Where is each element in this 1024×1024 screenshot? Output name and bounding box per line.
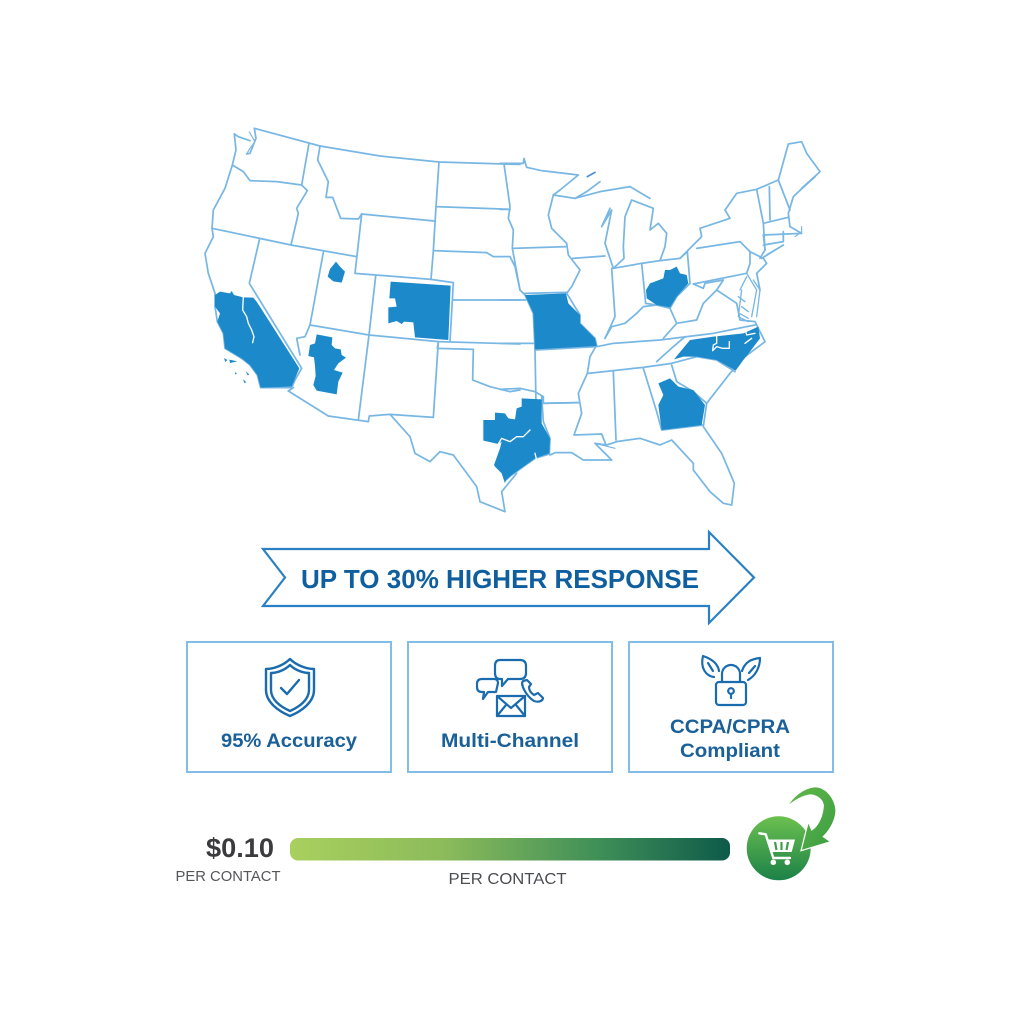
label: CCPA/CPRA Compliant [670, 716, 790, 762]
response arrow banner [263, 532, 754, 623]
return arrow [787, 787, 836, 851]
label: CCPA/CPRA Compliant: CCPA/CPRA [670, 716, 790, 738]
cart glyph [759, 833, 795, 865]
card: accuracy [187, 642, 391, 772]
state: Ohio region [646, 267, 688, 307]
state: California [215, 291, 299, 388]
US map [205, 128, 820, 512]
state: North Carolina [674, 327, 760, 371]
state: Texas region [483, 398, 550, 483]
label: Multi-Channel: Multi-Channel [441, 730, 579, 752]
price: $0.10 per contact: PER CONTACT [176, 868, 280, 885]
icon: padlock with leaves [702, 656, 760, 705]
price: $0.10 per contact [176, 833, 280, 885]
arrow outline [263, 532, 754, 623]
label: 95% Accuracy: 95% Accuracy [221, 730, 357, 752]
east state borders [500, 142, 820, 505]
icon: shield check [266, 659, 314, 716]
state: Utah region [328, 262, 345, 283]
highlighted and outlined eastern states [483, 142, 820, 505]
state: Georgia [658, 378, 705, 430]
icon: chat, mail and phone [477, 660, 543, 716]
price: $0.10 per contact: $0.10 [206, 833, 274, 863]
state: Arizona region [308, 334, 346, 394]
icon: shopping cart with green arrow [747, 787, 836, 880]
label: CCPA/CPRA Compliant: Compliant [680, 740, 781, 762]
state: Colorado [388, 282, 451, 340]
highlighted and outlined western states [205, 128, 520, 512]
cart circle [747, 816, 811, 880]
gradient cost bar [290, 838, 730, 860]
arrow label: UP TO 30% HIGHER RESPONSE [301, 564, 699, 594]
card: compliance [629, 642, 833, 772]
card: multi-channel [408, 642, 612, 772]
state: Missouri [525, 293, 597, 349]
bar caption: PER CONTACT [448, 871, 567, 888]
west state borders [205, 128, 520, 512]
